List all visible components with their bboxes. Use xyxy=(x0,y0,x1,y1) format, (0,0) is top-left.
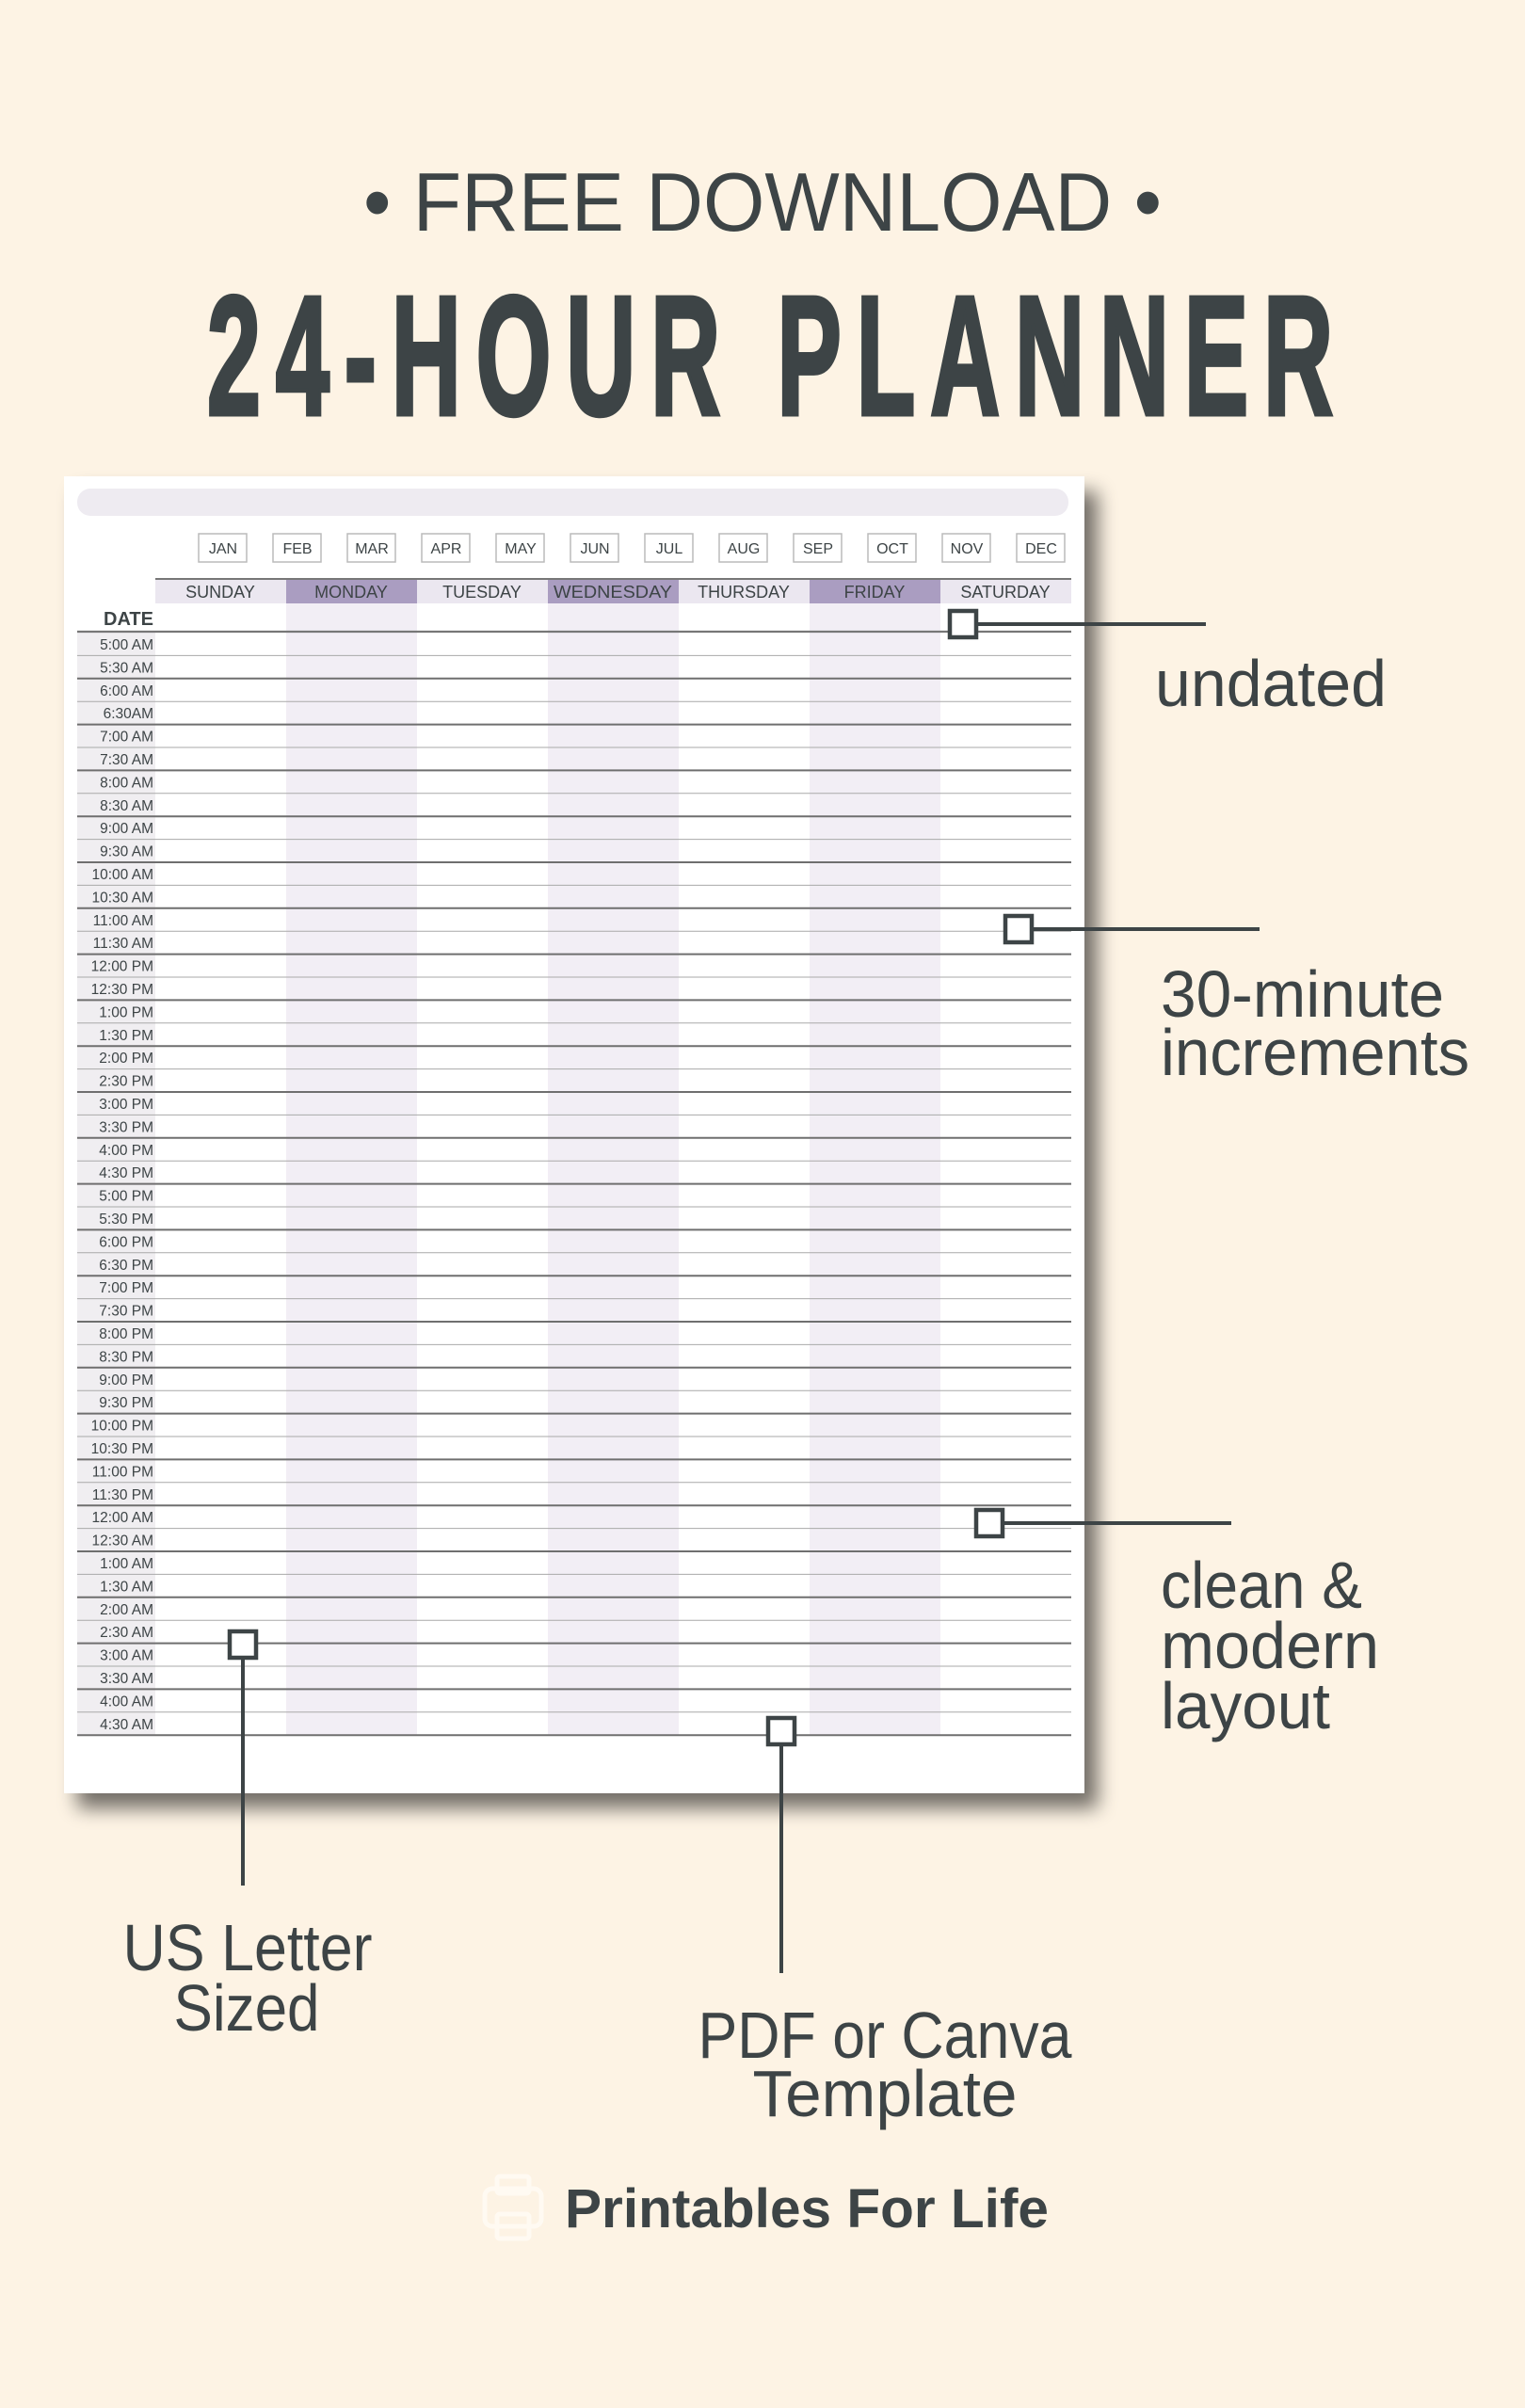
callout: 30-minute increments xyxy=(1005,916,1469,1089)
callout: US Letter sized: US Letter xyxy=(122,1911,373,1984)
date label: DATE xyxy=(104,609,153,630)
time labels: 10:00 PM xyxy=(91,1419,153,1435)
day headers: TUESDAY xyxy=(442,583,522,602)
time labels: 11:30 PM xyxy=(92,1487,153,1503)
callout: US Letter sized: Sized xyxy=(173,1971,320,2045)
time labels: 12:30 PM xyxy=(91,982,153,998)
time labels: 10:00 AM xyxy=(92,867,153,883)
time labels: 3:30 PM xyxy=(99,1119,153,1135)
month boxes xyxy=(199,534,1065,562)
time labels: 12:00 AM xyxy=(92,1510,153,1526)
month boxes: MAR xyxy=(355,541,389,557)
month boxes: MAY xyxy=(505,541,537,557)
time labels: 3:00 PM xyxy=(99,1097,153,1113)
time labels: 6:00 AM xyxy=(100,683,153,699)
time labels: 4:30 PM xyxy=(99,1165,153,1181)
time labels: 10:30 PM xyxy=(91,1441,153,1457)
callout: US Letter sized xyxy=(122,1631,373,2045)
day headers xyxy=(155,579,1071,603)
time labels: 5:00 AM xyxy=(100,637,153,653)
month boxes: NOV xyxy=(951,541,984,557)
time labels: 2:00 PM xyxy=(99,1051,153,1067)
day headers: THURSDAY xyxy=(698,583,790,602)
month boxes: FEB xyxy=(282,541,313,557)
day headers: MONDAY xyxy=(314,583,388,602)
time labels: 9:30 AM xyxy=(100,844,153,860)
day headers: WEDNESDAY xyxy=(554,583,672,602)
time labels: 8:00 PM xyxy=(99,1326,153,1342)
day headers: SUNDAY xyxy=(185,583,255,602)
time labels: 6:30 PM xyxy=(99,1258,153,1274)
time labels: 1:30 PM xyxy=(99,1028,153,1044)
time labels: 11:00 AM xyxy=(93,913,153,929)
time labels: 2:30 AM xyxy=(100,1625,153,1641)
time labels: 7:30 PM xyxy=(99,1304,153,1320)
callout: clean and modern layout xyxy=(976,1510,1379,1742)
time labels: 6:00 PM xyxy=(99,1234,153,1250)
time labels: 1:30 AM xyxy=(100,1579,153,1595)
time labels: 7:00 AM xyxy=(100,730,153,746)
callout: clean and modern layout: clean & xyxy=(1161,1549,1362,1622)
grid lines xyxy=(77,632,1071,1735)
month boxes: JUL xyxy=(656,541,682,557)
time labels: 9:00 PM xyxy=(99,1373,153,1389)
time labels: 2:30 PM xyxy=(99,1074,153,1090)
callout: PDF or Canva template: PDF or Canva xyxy=(698,1999,1072,2072)
time labels: 7:00 PM xyxy=(99,1280,153,1296)
time labels: 1:00 AM xyxy=(100,1556,153,1572)
time labels: 2:00 AM xyxy=(100,1602,153,1618)
time column background xyxy=(77,633,155,1735)
time labels: 3:30 AM xyxy=(100,1671,153,1687)
time labels: 7:30 AM xyxy=(100,752,153,768)
day headers: SATURDAY xyxy=(960,583,1051,602)
month boxes: JAN xyxy=(209,541,237,557)
time labels: 5:30 PM xyxy=(99,1212,153,1228)
header bar xyxy=(77,489,1068,516)
callout: 30-minute increments: 30-minute xyxy=(1161,957,1444,1031)
time labels xyxy=(91,637,153,1733)
time labels: 4:00 AM xyxy=(100,1694,153,1710)
callout: PDF or Canva template: Template xyxy=(753,2057,1017,2130)
callout: undated xyxy=(950,611,1387,720)
time labels: 4:00 PM xyxy=(99,1143,153,1159)
time labels: 9:00 AM xyxy=(100,821,153,837)
icon: printer xyxy=(485,2176,541,2239)
time labels: 8:00 AM xyxy=(100,775,153,791)
month boxes: JUN xyxy=(580,541,610,557)
time labels: 12:30 AM xyxy=(92,1533,153,1549)
time labels: 5:00 PM xyxy=(99,1189,153,1205)
month boxes: OCT xyxy=(876,541,908,557)
time labels: 11:30 AM xyxy=(93,936,153,952)
month boxes: SEP xyxy=(803,541,833,557)
time labels: 8:30 PM xyxy=(99,1349,153,1365)
time labels: 4:30 AM xyxy=(100,1717,153,1733)
time labels: 9:30 PM xyxy=(99,1395,153,1411)
time labels: 6:30AM xyxy=(104,706,153,722)
callout: 30-minute increments: increments xyxy=(1161,1016,1469,1089)
time labels: 3:00 AM xyxy=(100,1648,153,1664)
planner sheet xyxy=(64,476,1084,1793)
time labels: 11:00 PM xyxy=(92,1464,153,1480)
shaded columns xyxy=(286,603,940,1735)
callout: clean and modern layout: modern xyxy=(1161,1609,1379,1682)
day headers: FRIDAY xyxy=(844,583,905,602)
month boxes: APR xyxy=(431,541,461,557)
callout: clean and modern layout: layout xyxy=(1161,1669,1330,1742)
time labels: 10:30 AM xyxy=(92,890,153,906)
month boxes: DEC xyxy=(1025,541,1057,557)
callout: PDF or Canva template xyxy=(698,1718,1072,2130)
month boxes: AUG xyxy=(728,541,760,557)
callout: undated: undated xyxy=(1155,647,1387,720)
footer brand: Printables For Life xyxy=(565,2178,1049,2239)
time labels: 8:30 AM xyxy=(100,798,153,814)
subtitle: free download: • FREE DOWNLOAD • xyxy=(363,155,1162,249)
time labels: 5:30 AM xyxy=(100,660,153,676)
time labels: 12:00 PM xyxy=(91,959,153,975)
time labels: 1:00 PM xyxy=(99,1004,153,1020)
